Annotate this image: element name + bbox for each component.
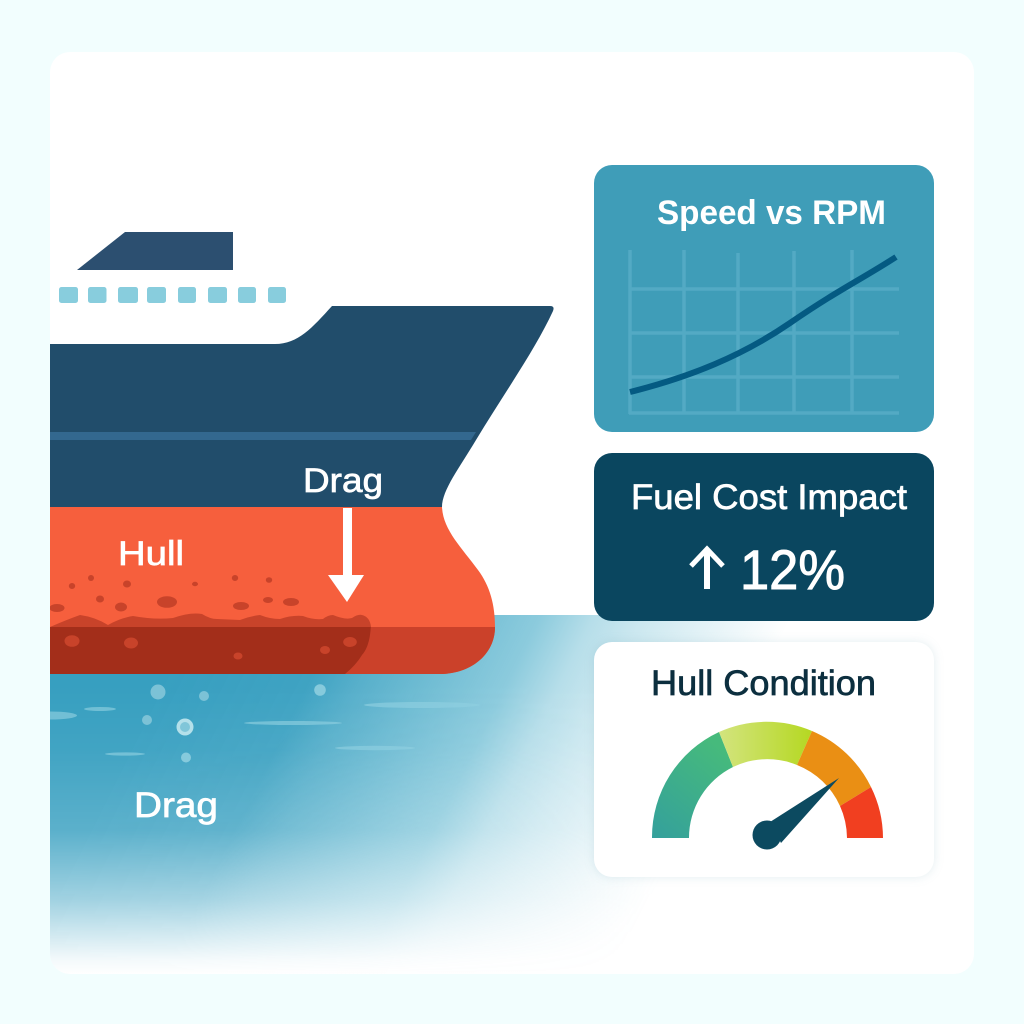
dark fouling below waterline xyxy=(50,627,371,674)
panel: speed vs rpm xyxy=(594,165,934,432)
orange hull xyxy=(50,507,495,674)
gauge segment: orange xyxy=(797,731,871,806)
speed curve xyxy=(630,257,896,392)
hull stripe xyxy=(50,432,476,440)
navy hull xyxy=(50,306,554,507)
value: 12 percent: 12% xyxy=(740,538,845,601)
ship cabin roof xyxy=(77,232,233,270)
waterline band xyxy=(346,627,495,674)
ship and water illustration xyxy=(23,232,974,975)
label: drag in water: Drag xyxy=(134,786,218,825)
gauge segment: red xyxy=(840,787,883,838)
bubbles xyxy=(142,684,326,762)
icon: up arrow xyxy=(691,549,723,589)
lower spots xyxy=(64,635,357,660)
barnacle spots xyxy=(50,575,299,612)
gauge segment: lime xyxy=(719,722,812,767)
ship windows xyxy=(59,287,286,303)
drag arrow xyxy=(328,508,364,602)
heading: hull condition: Hull Condition xyxy=(651,664,876,703)
heading: speed vs rpm: Speed vs RPM xyxy=(657,194,886,232)
fouling growth xyxy=(50,575,371,627)
panel: fuel cost impact xyxy=(594,453,934,621)
water xyxy=(50,615,766,964)
panel: hull condition xyxy=(594,642,934,877)
heading: fuel cost impact: Fuel Cost Impact xyxy=(631,478,907,517)
gauge segment: green xyxy=(652,732,733,838)
water streaks xyxy=(23,702,480,756)
gauge needle xyxy=(752,778,839,850)
gauge xyxy=(652,722,883,850)
label: drag on hull: Drag xyxy=(303,462,383,500)
line chart xyxy=(629,250,899,414)
label: hull: Hull xyxy=(118,535,184,573)
